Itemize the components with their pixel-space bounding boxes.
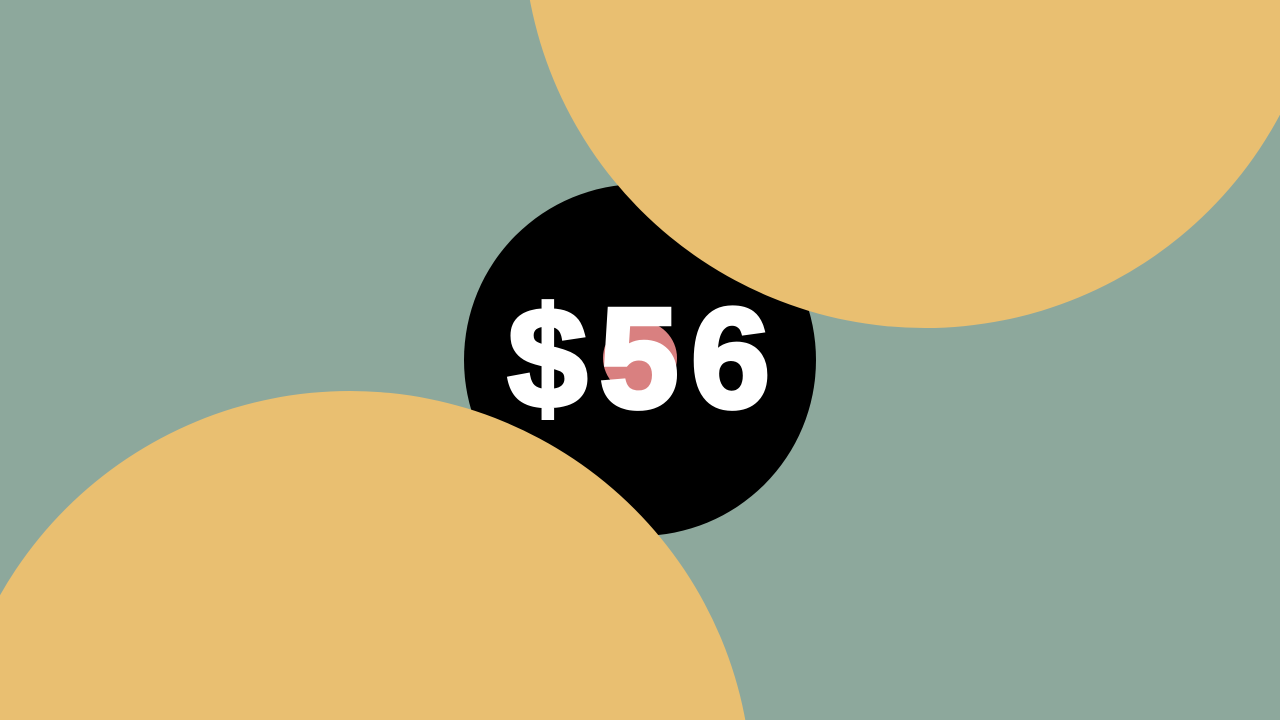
black price circle xyxy=(464,184,816,536)
yellow circle bottom left xyxy=(0,391,752,720)
yellow circle top right xyxy=(523,0,1280,328)
pink accent circle xyxy=(603,321,677,395)
price text: $56 xyxy=(508,279,770,438)
